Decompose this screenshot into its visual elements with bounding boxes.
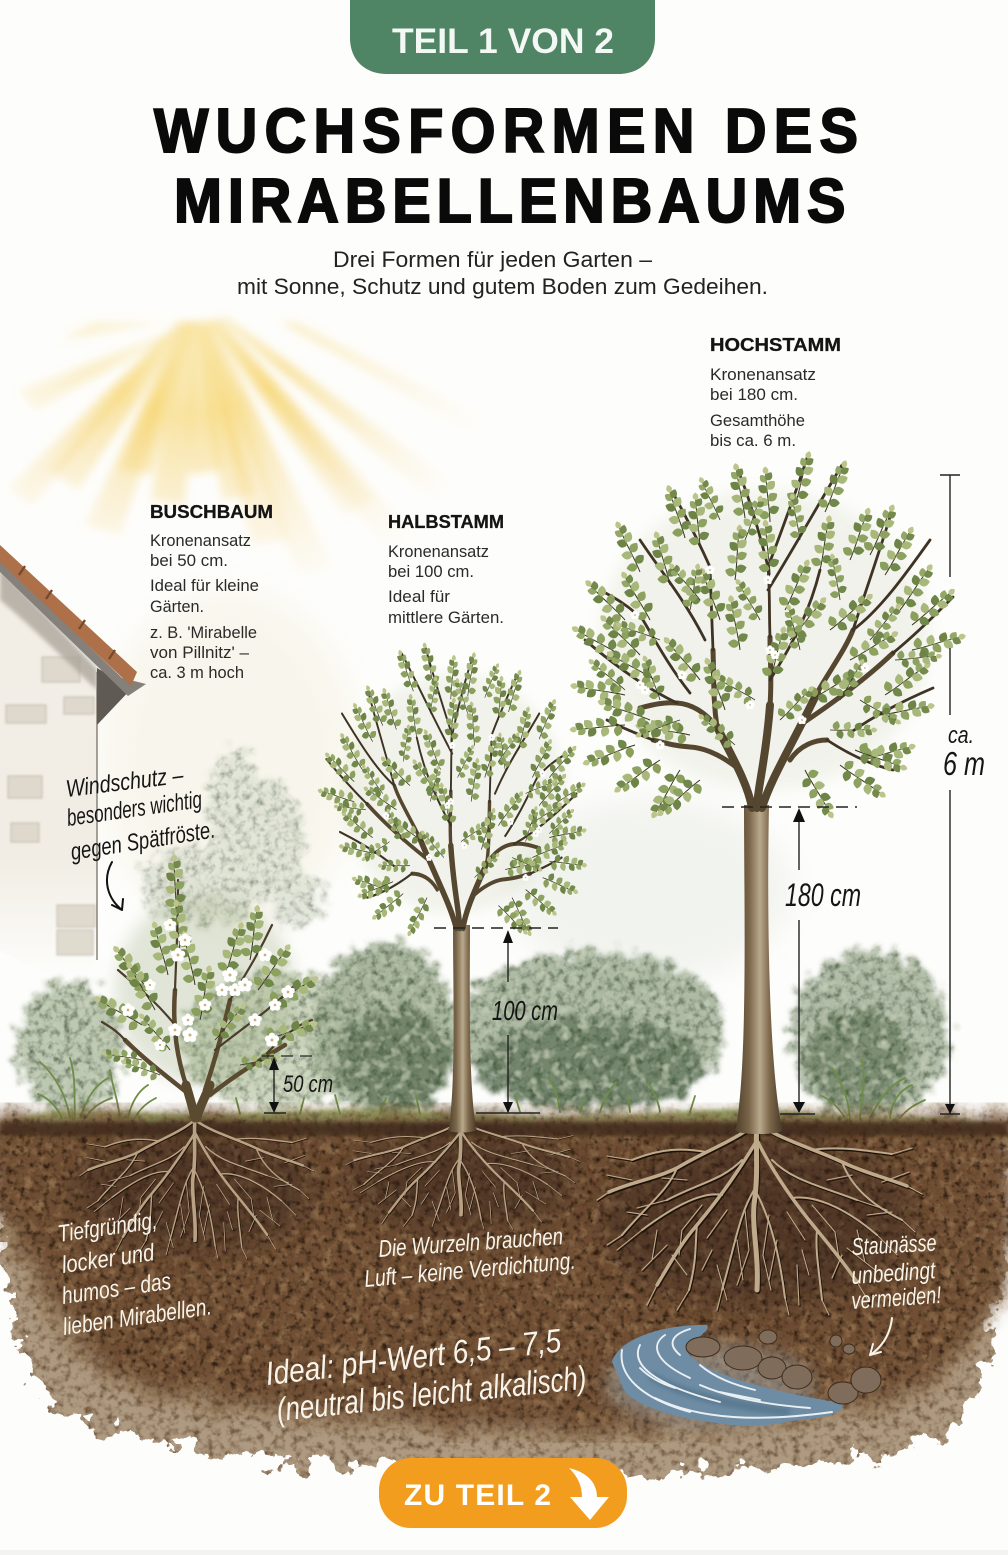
wall <box>0 572 97 977</box>
dimension: 50 cm: 50 cm <box>283 1071 333 1098</box>
soffit <box>97 668 132 725</box>
label: Hochstamm <box>710 335 841 450</box>
note: pH value: Ideal: pH-Wert 6,5 – 7,5 <box>264 1322 563 1392</box>
label: Buschbaum: ca. 3 m hoch <box>150 664 244 682</box>
label: Buschbaum: von Pillnitz' – <box>150 644 250 662</box>
flowers and grass strip <box>0 1058 1008 1136</box>
hedges <box>18 942 950 1120</box>
note: roots need air <box>363 1223 577 1293</box>
Halbstamm tree <box>316 640 590 1132</box>
house wall and roof <box>0 545 146 977</box>
note: waterlogging: vermeiden! <box>851 1282 942 1315</box>
title <box>154 96 858 235</box>
label: Hochstamm: Kronenansatz <box>710 366 816 384</box>
note: wind protection: Windschutz – <box>64 762 185 803</box>
note: pH value: (neutral bis leicht alkalisch) <box>275 1359 588 1428</box>
note: wind protection <box>64 762 217 866</box>
Halbstamm roots <box>346 1120 581 1230</box>
dimension: 180 cm: 180 cm <box>785 877 861 913</box>
Buschbaum roots <box>80 1118 315 1259</box>
note: waterlogging: Staunässe <box>851 1230 937 1261</box>
title badge <box>350 0 655 74</box>
note: roots need air: Luft – keine Verdichtung. <box>363 1248 577 1293</box>
label: Buschbaum: z. B. 'Mirabelle <box>150 624 257 642</box>
sun rays <box>8 318 590 575</box>
note: roots need air: Die Wurzeln brauchen <box>378 1223 564 1263</box>
subtitle <box>237 247 768 299</box>
label: Halbstamm <box>388 512 504 627</box>
button: to part 2: ZU TEIL 2 <box>404 1479 551 1512</box>
note: waterlogging: unbedingt <box>851 1257 937 1290</box>
label: Buschbaum <box>150 502 273 682</box>
label: Halbstamm: Kronenansatz <box>388 543 489 561</box>
label: Buschbaum: bei 50 cm. <box>150 552 228 570</box>
stones <box>686 1330 881 1404</box>
subtitle: Drei Formen für jeden Garten – <box>333 247 653 272</box>
arrow: wind note <box>107 862 123 910</box>
label: Hochstamm: Gesamthöhe <box>710 412 805 430</box>
note: soil quality: humos – das <box>60 1268 173 1310</box>
ghost tree behind Buschbaum <box>140 750 323 926</box>
label: Halbstamm: HALBSTAMM <box>388 512 504 532</box>
note: soil quality: lieben Mirabellen. <box>61 1293 213 1341</box>
Hochstamm tree <box>566 448 969 1134</box>
dimension: 100 cm: 100 cm <box>492 995 558 1026</box>
label: Buschbaum: Gärten. <box>150 598 204 616</box>
icon: down arrow <box>569 1468 609 1520</box>
label: Buschbaum: Kronenansatz <box>150 532 251 550</box>
title: MIRABELLENBAUMS <box>174 166 845 235</box>
bottom edge <box>0 1550 1008 1555</box>
pond <box>605 1325 843 1427</box>
dimension: total height 6 m: ca. <box>948 722 974 749</box>
label: Halbstamm: mittlere Gärten. <box>388 609 504 627</box>
note: pH value <box>264 1322 588 1428</box>
note: soil quality: Tiefgründig, <box>56 1207 159 1248</box>
note: soil quality: locker und <box>60 1239 156 1279</box>
roof tiles <box>0 545 137 686</box>
dimension: 50 cm <box>262 1056 333 1113</box>
note: wind protection: besonders wichtig <box>65 786 204 832</box>
subtitle: mit Sonne, Schutz und gutem Boden zum Gedeihen. <box>237 274 768 299</box>
note: waterlogging <box>851 1230 942 1315</box>
note: soil quality <box>56 1207 213 1341</box>
Buschbaum tree <box>88 854 324 1118</box>
arrow: waterlogging note <box>870 1318 892 1355</box>
label: Hochstamm: bis ca. 6 m. <box>710 432 796 450</box>
soil cross-section <box>0 1118 1008 1479</box>
label: Hochstamm: HOCHSTAMM <box>710 335 841 355</box>
dimension: 100 cm <box>434 928 558 1113</box>
dimension: 180 cm <box>722 807 861 1114</box>
dimension: total height 6 m: 6 m <box>943 745 985 782</box>
button: to part 2 <box>379 1458 627 1528</box>
title badge: TEIL 1 VON 2 <box>392 22 614 61</box>
title: WUCHSFORMEN DES <box>154 96 858 165</box>
dimension: total height 6 m <box>940 475 985 1114</box>
label: Halbstamm: Ideal für <box>388 588 451 606</box>
note: wind protection: gegen Spätfröste. <box>69 816 217 866</box>
label: Buschbaum: Ideal für kleine <box>150 577 259 595</box>
label: Hochstamm: bei 180 cm. <box>710 386 798 404</box>
Hochstamm roots <box>597 1120 923 1316</box>
label: Buschbaum: BUSCHBAUM <box>150 502 273 522</box>
label: Halbstamm: bei 100 cm. <box>388 563 474 581</box>
